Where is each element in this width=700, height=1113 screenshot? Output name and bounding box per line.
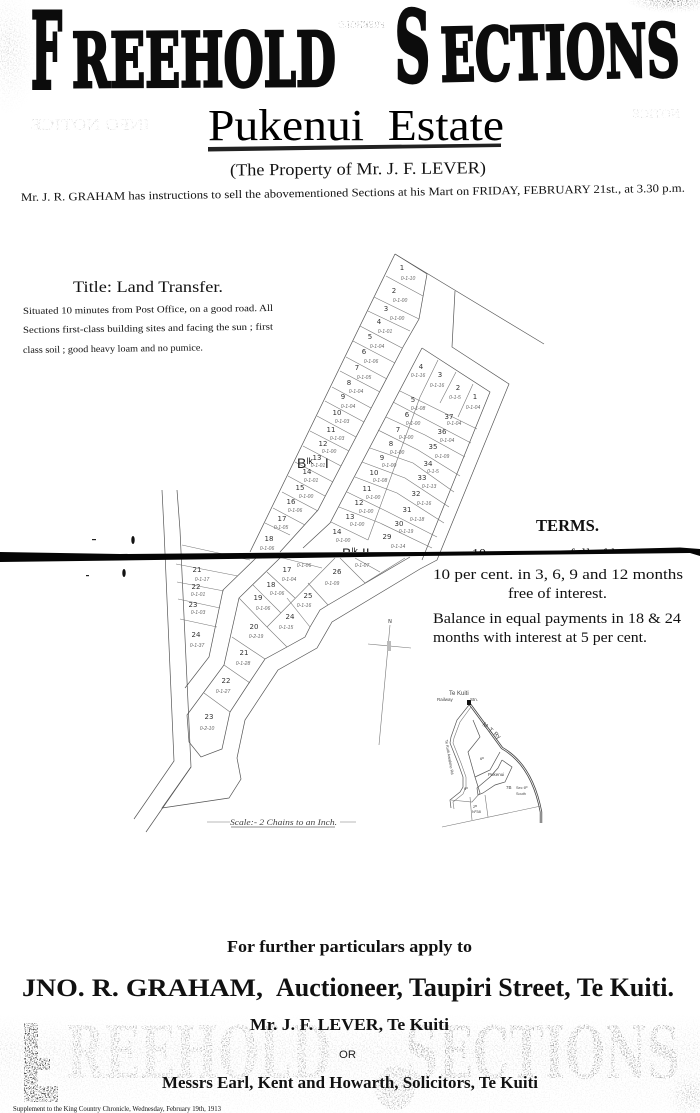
auction notice: Mr. J. R. GRAHAM has instructions to sell the abovementioned Sections at his Mart on FRIDAY, FEBRUARY 21st., at 3.30 p.m. xyxy=(21,183,685,204)
footer: owner contact: Mr. J. F. LEVER, Te Kuiti xyxy=(250,1015,449,1034)
block I label: I xyxy=(325,455,329,471)
block I: 0-1-00 xyxy=(393,298,407,304)
lower lots: 0-1-04 xyxy=(282,577,296,583)
heading: land transfer: Title: Land Transfer. xyxy=(73,279,223,296)
block I: 0-1-06 xyxy=(288,508,302,514)
description text: class soil ; good heavy loam and no pumice. xyxy=(23,343,203,356)
subtitle: Pukenui Estate: Pukenui Estate xyxy=(208,101,504,150)
lower lots: 0-1-06 xyxy=(297,563,311,569)
block II: 0-1-16 xyxy=(411,373,425,379)
block I label: lk xyxy=(306,456,313,466)
paper speckle and show-through: FREEHOLD xyxy=(338,20,385,30)
terms text: months with interest at 5 per cent. xyxy=(433,630,647,646)
block II: 12 xyxy=(355,499,363,507)
description text: Situated 10 minutes from Post Office, on a good road. All xyxy=(23,303,273,317)
lower lots: 0-1-07 xyxy=(355,563,369,569)
description text xyxy=(23,303,273,356)
block II: 0-1-09 xyxy=(435,454,449,460)
inset locality map: 7B xyxy=(506,785,512,790)
lower lots: 24 xyxy=(286,613,295,621)
cut-off terms line: fall of hammer xyxy=(570,547,660,562)
block I: 7 xyxy=(355,364,359,372)
panel: title and description xyxy=(23,279,273,356)
scale note: Scale:- 2 Chains to an Inch. xyxy=(230,817,337,827)
terms text: free of interest. xyxy=(508,586,607,602)
owner line: (The Property of Mr. J. F. LEVER) xyxy=(230,158,486,179)
lower lots: 0-1-09 xyxy=(325,581,339,587)
block I: 13 xyxy=(313,454,321,462)
inset locality map xyxy=(437,691,541,827)
block I: 2 xyxy=(392,287,396,295)
block I: 3 xyxy=(384,305,388,313)
block II: 34 xyxy=(424,460,433,468)
block II: 6 xyxy=(405,411,410,419)
block I: 0-1-06 xyxy=(364,359,378,365)
lower lots: 0-1-17 xyxy=(195,577,209,583)
block I: 17 xyxy=(278,515,286,523)
block II: 0-1-04 xyxy=(440,438,454,444)
block I: 1 xyxy=(400,264,404,272)
terms text xyxy=(433,567,683,646)
block II: 0-1-13 xyxy=(422,484,436,490)
footer: auctioneer: Auctioneer, Taupiri Street, Te Kuiti. xyxy=(276,973,674,1002)
block I: 10 xyxy=(333,409,341,417)
inset locality map: Nº38 xyxy=(472,809,482,814)
lower lots: 23 xyxy=(205,713,213,721)
lower lots: 21 xyxy=(240,649,248,657)
block II: 0-1-18 xyxy=(410,517,424,523)
block I: 0-1-04 xyxy=(370,344,384,350)
lower lots: 19 xyxy=(254,594,262,602)
title: Freehold Sections: REEHOLD xyxy=(72,16,336,105)
block II: 0-1-00 xyxy=(399,435,413,441)
north arrow: N xyxy=(388,619,392,625)
block I: 0-1-06 xyxy=(260,546,274,552)
block II: 0-1-16 xyxy=(430,383,444,389)
lower lots: 20 xyxy=(250,623,258,631)
block II: 0-1-00 xyxy=(366,495,380,501)
paper speckle and show-through: NOTICE xyxy=(632,106,680,121)
block I: 11 xyxy=(327,426,335,434)
inset locality map: 6ᴰ xyxy=(464,786,468,791)
block II: 0-1-00 xyxy=(406,421,420,427)
inset locality map: Stn. xyxy=(470,697,478,702)
inset locality map: Pukenui xyxy=(488,772,504,777)
block II: 31 xyxy=(403,506,411,514)
block II: 32 xyxy=(412,490,420,498)
title: Freehold Sections xyxy=(31,0,680,113)
lower lots: 23 xyxy=(189,601,197,609)
block II: 5 xyxy=(411,396,415,404)
lower lots: 24 xyxy=(192,631,201,639)
block II: 14 xyxy=(333,528,342,536)
block II: 0-1-16 xyxy=(417,501,431,507)
cut-off terms line: 10 xyxy=(472,547,486,562)
block II: 0-1-00 xyxy=(382,463,396,469)
block I: 0-1-01 xyxy=(311,463,325,469)
block I: 16 xyxy=(287,498,296,506)
block I: 0-1-00 xyxy=(390,316,404,322)
block II: 30 xyxy=(395,520,403,528)
lower lots: 0-1-15 xyxy=(279,625,293,631)
block II: 11 xyxy=(363,485,371,493)
inset locality map: 2ᴮ xyxy=(473,804,477,809)
block II: 9 xyxy=(380,454,384,462)
block II: 0-1-5 xyxy=(427,469,439,475)
lower lots: 18 xyxy=(267,581,275,589)
block II: 8 xyxy=(389,440,393,448)
block II: 0-1-04 xyxy=(447,421,461,427)
block I: 0-1-05 xyxy=(274,525,288,531)
block I: 0-1-00 xyxy=(322,449,336,455)
lower lots: 22 xyxy=(192,583,200,591)
lower lots: 0-1-03 xyxy=(191,610,205,616)
block I: 0-1-04 xyxy=(349,389,363,395)
ink marks xyxy=(86,536,135,577)
description text: Sections first-class building sites and facing the sun ; first xyxy=(23,322,273,336)
lower lots: 0-1-28 xyxy=(236,661,250,667)
roads and outer boundaries xyxy=(134,254,544,832)
footer: auctioneer xyxy=(22,973,674,1002)
block I: 6 xyxy=(362,348,367,356)
block I xyxy=(250,254,427,552)
block I: 14 xyxy=(303,468,312,476)
block II: 7 xyxy=(396,426,400,434)
block II: 29 xyxy=(383,533,391,541)
inset locality map: Sec 6ᴰ xyxy=(516,786,528,790)
block I label: B xyxy=(297,455,306,471)
block I: 0-1-04 xyxy=(341,404,355,410)
block I: 0-1-01 xyxy=(304,478,318,484)
block I: 12 xyxy=(319,440,327,448)
terms text: Balance in equal payments in 18 & 24 xyxy=(433,611,682,627)
block I: 18 xyxy=(265,535,273,543)
block I: 15 xyxy=(296,484,304,492)
block I: 0-1-10 xyxy=(401,276,415,282)
panel: terms xyxy=(433,516,683,646)
footer: solicitors: Messrs Earl, Kent and Howarth, Solicitors, Te Kuiti xyxy=(162,1073,538,1092)
lower lots: 0-1-01 xyxy=(191,592,205,598)
block I: 0-1-01 xyxy=(378,329,392,335)
lower lots: 26 xyxy=(333,568,342,576)
lower lots: 0-1-06 xyxy=(256,606,270,612)
block I: 0-1-03 xyxy=(330,436,344,442)
block II: 0-1-00 xyxy=(336,538,350,544)
lower lots: 25 xyxy=(304,592,312,600)
block II: 37 xyxy=(445,413,453,421)
map: subdivision plan xyxy=(134,254,544,832)
block II: 0-1-00 xyxy=(390,450,404,456)
block II label: II xyxy=(362,545,370,561)
lower lots: 0-1-06 xyxy=(270,591,284,597)
lower lots: 21 xyxy=(193,566,201,574)
block II: 2 xyxy=(456,384,460,392)
block II: 0-1-5 xyxy=(449,395,461,401)
lower lots: 17 xyxy=(283,566,291,574)
block II: 0-1-04 xyxy=(466,405,480,411)
inset locality map: 6ᴰ xyxy=(480,756,484,761)
block I: 8 xyxy=(347,379,351,387)
inset locality map: Te Kuiti xyxy=(449,691,469,697)
block II: 0-1-19 xyxy=(399,529,413,535)
block II: 1 xyxy=(473,393,477,401)
block II: 3 xyxy=(438,371,442,379)
block II: 0-1-08 xyxy=(373,478,387,484)
block II: 36 xyxy=(438,428,447,436)
inset locality map: South xyxy=(516,792,526,796)
paper speckle and show-through: INFO NOTICE xyxy=(30,115,150,134)
block II: 0-1-00 xyxy=(350,522,364,528)
inset locality map: M. T. Ry xyxy=(481,722,501,741)
lower lots: 0-1-27 xyxy=(216,689,230,695)
lower lots xyxy=(176,545,410,757)
lower lots: 0-1-16 xyxy=(297,603,311,609)
lower lots: 22 xyxy=(222,677,230,685)
block II: 35 xyxy=(429,443,437,451)
block I: 0-1-00 xyxy=(299,494,313,500)
lower lots: 0-1-37 xyxy=(190,643,204,649)
block II: 33 xyxy=(418,474,426,482)
heading: terms: TERMS. xyxy=(536,516,599,535)
lower lots: 0-2-19 xyxy=(249,634,263,640)
footer: auctioneer: JNO. R. GRAHAM, xyxy=(22,975,263,1002)
footer: supplement note: Supplement to the King Country Chronicle, Wednesday, February 19th, 1913 xyxy=(13,1104,221,1113)
torn paper black band xyxy=(0,548,700,562)
block II: 0-1-08 xyxy=(411,406,425,412)
block I: 4 xyxy=(377,318,382,326)
block II: 4 xyxy=(419,363,424,371)
terms text: 10 per cent. in 3, 6, 9 and 12 months xyxy=(433,567,683,583)
north arrow xyxy=(368,619,411,745)
block I: 9 xyxy=(341,393,345,401)
cut-off terms line xyxy=(473,548,614,552)
footer: further particulars: For further particulars apply to xyxy=(227,937,472,956)
inset locality map: Te Kuiti Awakino Rd xyxy=(444,739,455,775)
block I: 0-1-03 xyxy=(335,419,349,425)
lower lots: 0-2-10 xyxy=(200,726,214,732)
inset locality map: Railway xyxy=(437,697,454,702)
block I: 0-1-05 xyxy=(357,375,371,381)
block II: 10 xyxy=(370,469,378,477)
block II: 13 xyxy=(346,513,354,521)
footer: or: OR xyxy=(339,1049,356,1061)
block II: 0-1-14 xyxy=(391,544,405,550)
block II label: lk xyxy=(351,546,358,556)
block II xyxy=(303,348,490,561)
paper speckle and show-through: REEHOLD xyxy=(66,1010,331,1095)
block II: 0-1-00 xyxy=(359,509,373,515)
block II label: B xyxy=(342,545,351,561)
block I: 5 xyxy=(368,333,372,341)
